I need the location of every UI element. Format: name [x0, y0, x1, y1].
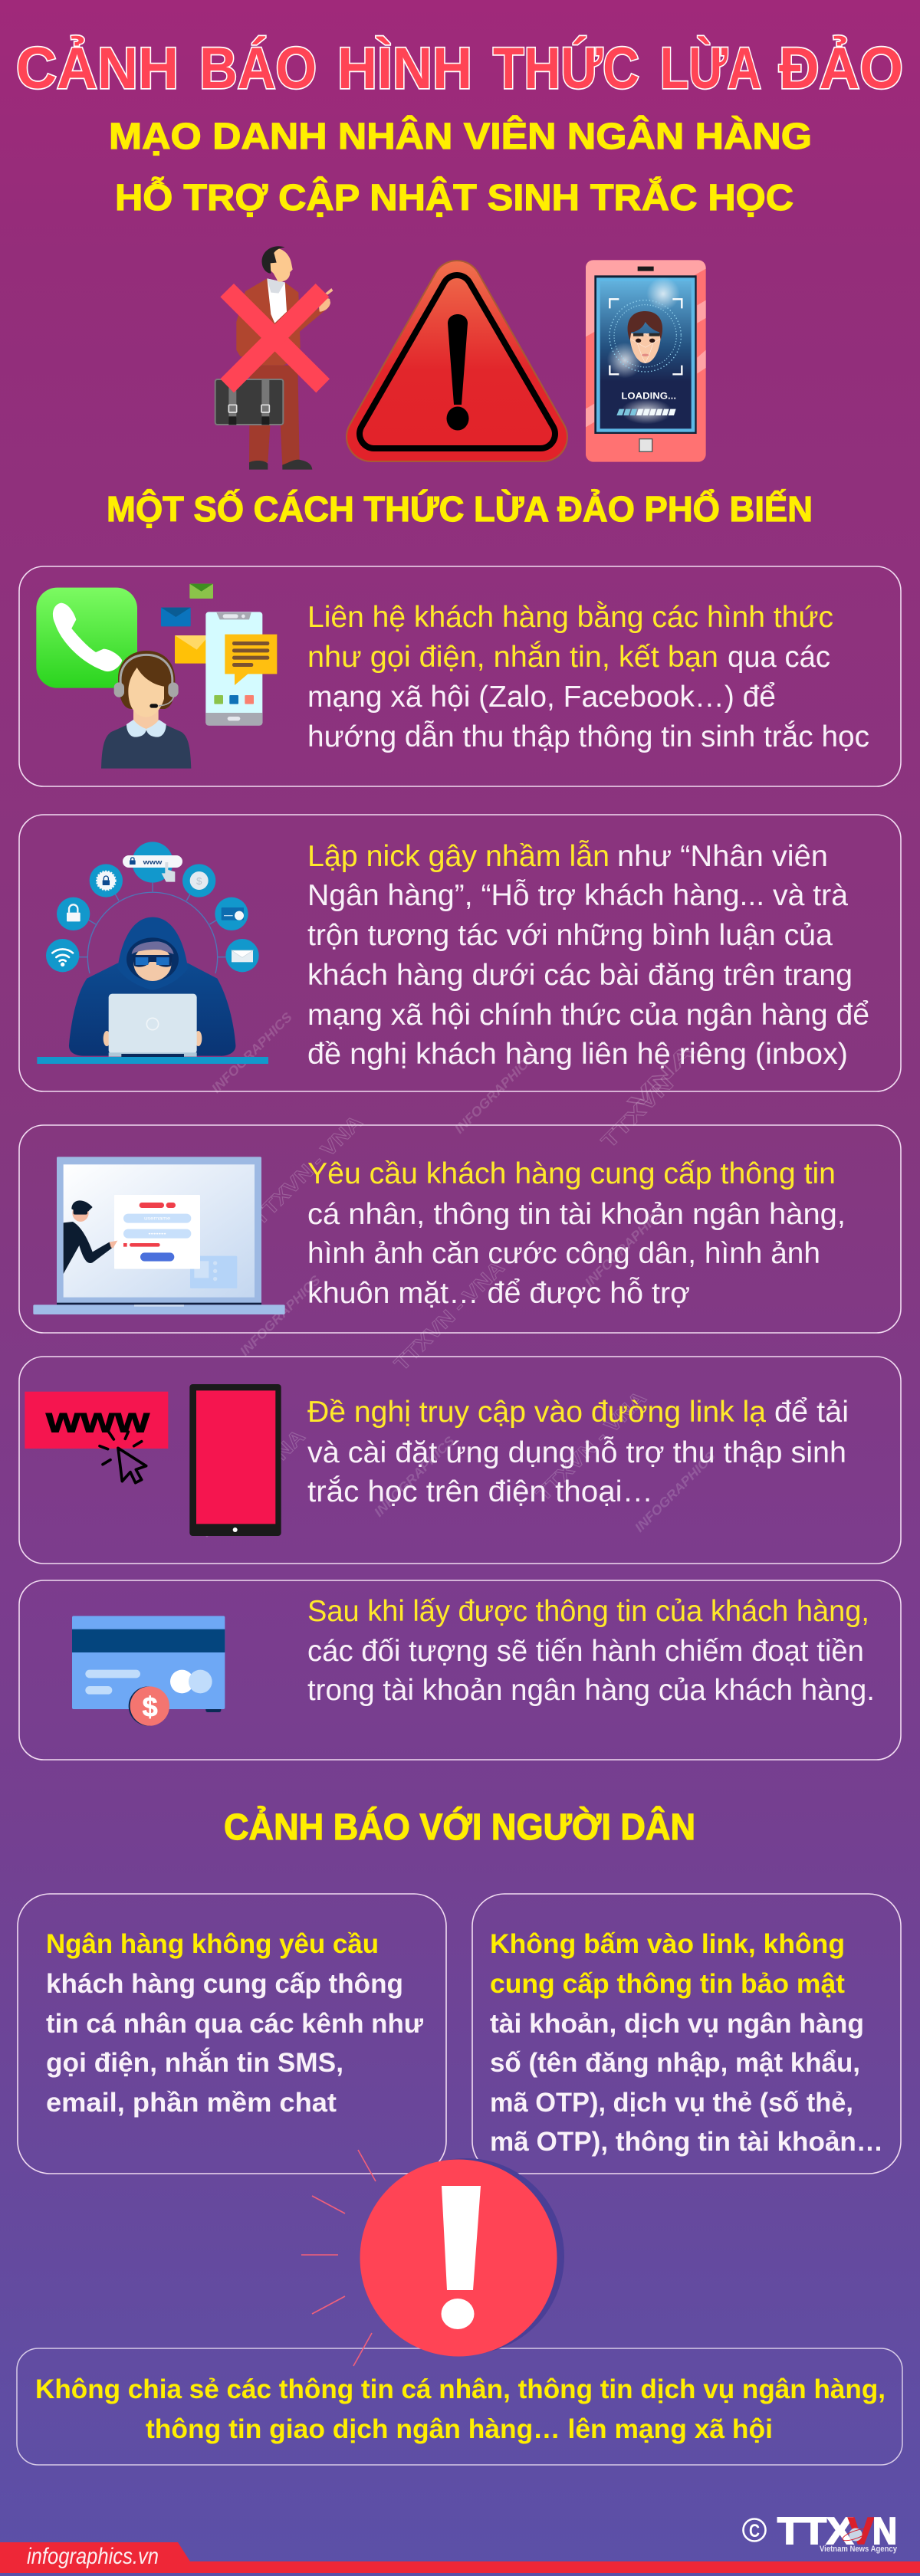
- panel: requesting personal information: [19, 1125, 901, 1333]
- icon: exclamation circle: [301, 2150, 564, 2366]
- watermark: TTXVN: [596, 1071, 678, 1153]
- heading: common scam methods: MỘT SỐ CÁCH THỨC LỪA ĐẢO PHỔ BIẾN: [107, 489, 813, 529]
- text block: mạng xã hội chính thức của ngân hàng để: [307, 999, 869, 1032]
- text block: [307, 1396, 849, 1508]
- footer: red bar with site name: [0, 2542, 920, 2573]
- icon: www banner, cursor and tablet: [25, 1384, 281, 1536]
- text block: Sau khi lấy được thông tin của khách hàng,: [307, 1595, 869, 1628]
- panel: strange links: [19, 1357, 901, 1564]
- panel: bank does not request information: khách hàng cung cấp thông: [46, 1969, 403, 1999]
- text block: như “Nhân viên: [617, 840, 828, 873]
- text block: Lập nick gây nhầm lẫn: [307, 840, 610, 873]
- icon: laptop with thief and login form: username: [144, 1216, 171, 1222]
- panel: do not share on social networks: thông tin giao dịch ngân hàng… lên mạng xã hội: [146, 2414, 773, 2444]
- icon: laptop with thief and login form: [33, 1157, 285, 1314]
- text block: khuôn mặt… để được hỗ trợ: [307, 1277, 690, 1310]
- logo: TTXVN: Vietnam News Agency: [820, 2545, 898, 2554]
- subtitle: MẠO DANH NHÂN VIÊN NGÂN HÀNG: [109, 115, 812, 157]
- text block: [307, 1157, 846, 1310]
- panel: do not click links: mã OTP), dịch vụ thẻ (số thẻ,: [490, 2088, 853, 2118]
- text block: các đối tượng sẽ tiến hành chiếm đoạt tiền: [307, 1635, 864, 1668]
- logo: TTXVN: C: [749, 2521, 760, 2542]
- title: HÌNH: [337, 36, 472, 101]
- subtitle: [109, 115, 812, 218]
- title: BÁO: [199, 36, 317, 101]
- heading: warning to the public: CẢNH BÁO VỚI NGƯỜI DÂN: [224, 1806, 695, 1848]
- text block: [307, 601, 869, 753]
- panel: bank does not request information: gọi điện, nhắn tin SMS,: [46, 2047, 343, 2078]
- panel: stealing money: [19, 1580, 901, 1760]
- text block: trong tài khoản ngân hàng của khách hàng.: [307, 1674, 875, 1707]
- text block: [307, 840, 869, 1071]
- watermark: INFOGRAPHICS: [209, 1009, 295, 1096]
- icon: briefcase: [215, 379, 283, 425]
- watermark: VNA: [623, 1039, 699, 1114]
- panel: do not click links: Không bấm vào link, không: [490, 1929, 845, 1959]
- icon: hooded hacker: www: [142, 858, 163, 865]
- panel: do not click links: cung cấp thông tin bảo mật: [490, 1969, 845, 1999]
- icon: laptop with thief and login form: •••••••: [148, 1232, 166, 1237]
- icon: phone with face recognition: LOADING...: [621, 391, 676, 402]
- panel: bank does not request information: tin cá nhân qua các kênh như: [46, 2009, 424, 2039]
- text block: [307, 1595, 875, 1707]
- icon: bank card and coin: [72, 1616, 225, 1726]
- watermark: INFOGRAPHICS: [371, 1433, 458, 1520]
- title: THỨC: [493, 36, 639, 101]
- icon: phone with face recognition: [586, 260, 706, 462]
- panel: bank does not request information: Ngân hàng không yêu cầu: [46, 1929, 379, 1959]
- watermark: INFOGRAPHICS: [582, 1203, 669, 1290]
- icon: www banner, cursor and tablet: www: [45, 1400, 150, 1439]
- panel: contact by calls and messages: [19, 566, 901, 786]
- watermark: TTXVN - VNA: [190, 1425, 310, 1544]
- watermark: INFOGRAPHICS: [452, 1050, 538, 1137]
- watermark: TTXVN - VNA: [531, 1386, 651, 1505]
- text block: Liên hệ khách hàng bằng các hình thức: [307, 601, 833, 634]
- panel: bank does not request information: email, phần mềm chat: [46, 2088, 337, 2118]
- title: LỪA: [660, 36, 761, 101]
- text block: Ngân hàng”, “Hỗ trợ khách hàng... và trà: [307, 879, 848, 912]
- icon: warning triangle: [371, 285, 543, 437]
- panel: fake nicknames: [19, 815, 901, 1091]
- text block: Đề nghị truy cập vào đường link lạ: [307, 1396, 766, 1429]
- text block: trắc học trên điện thoại…: [307, 1475, 653, 1508]
- text block: cá nhân, thông tin tài khoản ngân hàng,: [307, 1198, 846, 1231]
- panel: do not click links: số (tên đăng nhập, mật khẩu,: [490, 2048, 860, 2078]
- logo: TTXVN: N: [872, 2511, 897, 2552]
- text block: như gọi điện, nhắn tin, kết bạn: [307, 641, 718, 674]
- panel: do not share on social networks: Không chia sẻ các thông tin cá nhân, thông tin dịch vụ ngân hàng,: [35, 2374, 886, 2404]
- text block: để tải: [774, 1396, 849, 1429]
- logo: TTXVN: TTX: [777, 2511, 853, 2552]
- watermark: TTXVN - VNA: [389, 1256, 509, 1375]
- watermark: [190, 1009, 718, 1544]
- icon: businessman crossed out: [215, 246, 333, 470]
- icon: hooded hacker: $: [196, 875, 202, 887]
- panel: do not click links: tài khoản, dịch vụ ngân hàng: [490, 2009, 864, 2039]
- text block: khách hàng dưới các bài đăng trên trang: [307, 959, 853, 992]
- panel: do not click links: mã OTP), thông tin tài khoản…: [490, 2127, 883, 2157]
- icon: call centre with phone and envelopes: [36, 584, 277, 769]
- text block: Yêu cầu khách hàng cung cấp thông tin: [307, 1157, 836, 1190]
- text block: hướng dẫn thu thập thông tin sinh trắc học: [307, 720, 869, 753]
- text block: và cài đặt ứng dụng hỗ trợ thu thập sinh: [307, 1436, 846, 1469]
- icon: red cross: [220, 284, 330, 392]
- text block: hình ảnh căn cước công dân, hình ảnh: [307, 1237, 820, 1270]
- logo: TTXVN: [744, 2511, 898, 2554]
- title: ĐẢO: [779, 36, 903, 101]
- watermark: TTXVN - VNA: [248, 1111, 367, 1229]
- panel: do not share on social networks: [17, 2348, 902, 2465]
- watermark: INFOGRAPHICS: [632, 1449, 718, 1535]
- text block: đề nghị khách hàng liên hệ riêng (inbox): [307, 1038, 848, 1071]
- text block: mạng xã hội (Zalo, Facebook…) để: [307, 681, 776, 714]
- icon: bank card and coin: $: [143, 1691, 158, 1722]
- panel: bank does not request information: [18, 1894, 446, 2174]
- panel: do not click links: [472, 1894, 901, 2174]
- subtitle: HỖ TRỢ CẬP NHẬT SINH TRẮC HỌC: [115, 176, 794, 218]
- footer: red bar with site name: infographics.vn: [27, 2544, 159, 2569]
- watermark: INFOGRAPHICS: [237, 1272, 324, 1359]
- text block: trộn tương tác với những bình luận của: [307, 919, 833, 952]
- text block: qua các: [728, 641, 830, 674]
- title: CẢNH: [16, 36, 179, 101]
- logo: TTXVN: V: [848, 2511, 874, 2552]
- title: [16, 36, 903, 101]
- icon: hooded hacker: [37, 842, 268, 1064]
